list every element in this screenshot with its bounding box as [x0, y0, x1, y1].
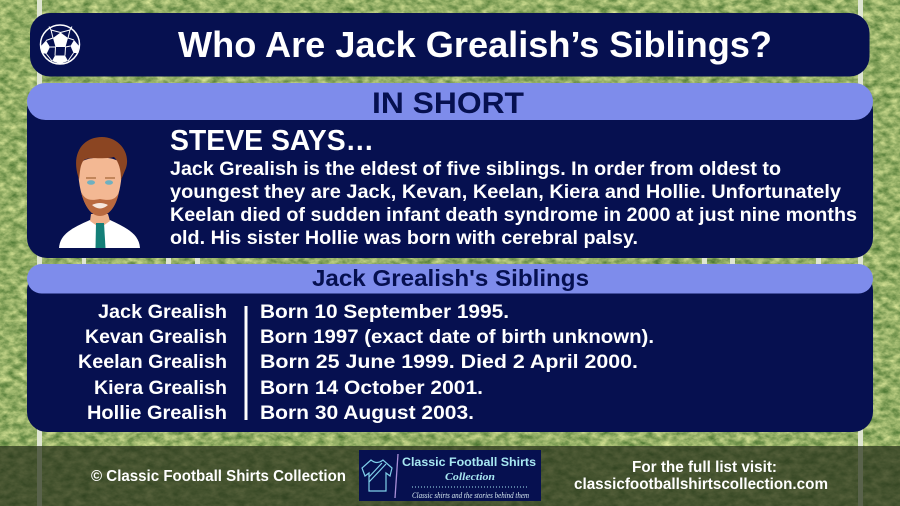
heading bar: siblings [27, 264, 873, 294]
icon: Steve avatar [59, 137, 140, 248]
text block: summary [170, 158, 857, 249]
sibling names: Jack Grealish [98, 301, 227, 323]
heading bar: in short: IN SHORT [372, 87, 524, 120]
birth dates: Born 30 August 2003. [260, 402, 474, 424]
website callout [574, 459, 828, 493]
sibling names: Kiera Grealish [94, 377, 227, 399]
birth dates: Born 25 June 1999. Died 2 April 2000. [260, 351, 638, 373]
panel: siblings [27, 264, 873, 432]
birth dates [260, 301, 654, 424]
logo [359, 450, 541, 501]
text block: summary: youngest they are Jack, Kevan, Keelan, Kiera and Hollie. Unfortunately [170, 181, 841, 203]
copyright text: © Classic Football Shirts Collection [91, 468, 346, 485]
birth dates: Born 14 October 2001. [260, 377, 483, 399]
sibling names: Keelan Grealish [78, 351, 227, 373]
sibling names [78, 301, 227, 424]
sibling names: Hollie Grealish [87, 402, 227, 424]
heading: Steve says: STEVE SAYS… [170, 125, 374, 157]
logo: Classic shirts and the stories behind them [412, 491, 529, 500]
heading bar: siblings: Jack Grealish's Siblings [312, 265, 589, 291]
footer band [0, 446, 900, 506]
text block: summary: old. His sister Hollie was born with cerebral palsy. [170, 227, 638, 249]
title text: Who Are Jack Grealish’s Siblings? [178, 24, 772, 65]
divider [244, 306, 248, 420]
birth dates: Born 10 September 1995. [260, 301, 509, 323]
birth dates: Born 1997 (exact date of birth unknown). [260, 326, 654, 348]
sibling names: Kevan Grealish [85, 326, 227, 348]
panel: in short [27, 83, 873, 258]
website callout: classicfootballshirtscollection.com [574, 476, 828, 493]
text block: summary: Keelan died of sudden infant death syndrome in 2000 at just nine months [170, 204, 857, 226]
logo: Collection [445, 471, 495, 483]
icon: football [40, 25, 80, 64]
icon: shirt [362, 460, 392, 491]
website callout: For the full list visit: [632, 459, 777, 476]
title banner [30, 13, 870, 76]
logo: Classic Football Shirts [402, 455, 536, 469]
heading bar: in short [27, 83, 873, 120]
text block: summary: Jack Grealish is the eldest of five siblings. In order from oldest to [170, 158, 781, 180]
